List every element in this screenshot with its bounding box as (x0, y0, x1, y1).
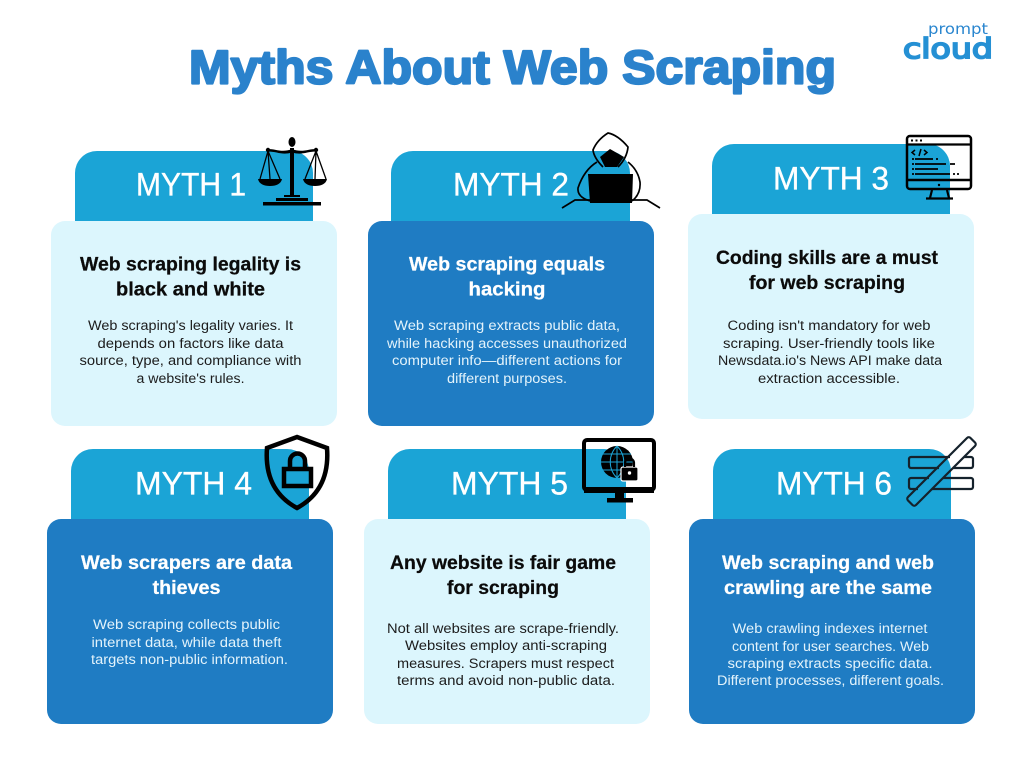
panel: myth 2 (368, 151, 654, 426)
icon: hooded hacker (562, 133, 660, 208)
panel: myth 5 (364, 449, 650, 724)
myth 1 body: a website's rules. (136, 371, 244, 386)
myth 1 body: Web scraping's legality varies. It (88, 318, 293, 333)
myth 3 body: scraping. User-friendly tools like (723, 336, 935, 351)
myth 3 heading: for web scraping (749, 273, 905, 294)
myth 4 heading: thieves (152, 578, 220, 599)
panel: myth 1 (51, 151, 337, 426)
myth 4 body (91, 617, 288, 667)
myth 4 heading (81, 553, 292, 599)
myth 6 heading: crawling are the same (724, 578, 932, 599)
myth 2 body (386, 318, 627, 386)
myth 1 heading: black and white (116, 280, 265, 300)
myth 3 body (718, 318, 943, 386)
myth 3 card (688, 214, 974, 419)
myth 3 body: extraction accessible. (758, 371, 900, 386)
myth 5 body: Not all websites are scrape-friendly. (387, 621, 619, 636)
myth 6 body (717, 621, 944, 688)
myth 1 heading: Web scraping legality is (80, 254, 301, 276)
myth 3 heading (716, 248, 939, 294)
myth 5 card (364, 519, 650, 724)
panel: myth 6 (689, 449, 975, 724)
myth 1 body: source, type, and compliance with (80, 353, 302, 368)
logo: prompt cloud: cloud (903, 32, 993, 65)
myth 5 label: MYTH 5 (451, 466, 568, 502)
myth 3 label: MYTH 3 (773, 160, 889, 196)
myth 6 heading (722, 553, 934, 599)
icon: security shield with padlock (267, 437, 327, 508)
myth 4 heading: Web scrapers are data (81, 553, 292, 574)
myth 2 heading: hacking (468, 280, 546, 300)
panel: myth 4 (47, 449, 333, 724)
myth 3 body: Newsdata.io's News API make data (718, 353, 943, 368)
myth 5 body: terms and avoid non-public data. (397, 673, 615, 688)
myth 2 body: Web scraping extracts public data, (394, 318, 620, 333)
myth 1 card (51, 221, 337, 426)
icon: code window monitor (907, 136, 971, 198)
myth 5 body: Websites employ anti-scraping (405, 638, 607, 653)
myth 6 body: content for user searches. Web (732, 639, 929, 654)
myth 4 label: MYTH 4 (135, 466, 252, 502)
myth 6 tab (713, 449, 951, 523)
myth 2 body: different purposes. (447, 371, 567, 386)
myth 5 body: measures. Scrapers must respect (397, 656, 614, 671)
logo: prompt cloud (903, 20, 993, 65)
myth 6 body: scraping extracts specific data. (728, 656, 932, 671)
myth 4 body: targets non-public information. (91, 652, 288, 667)
myth 2 label: MYTH 2 (453, 166, 569, 202)
myth 6 heading: Web scraping and web (722, 553, 934, 574)
panel: myth 3 (688, 144, 974, 419)
myth 5 heading (390, 553, 616, 599)
myth 2 tab (391, 151, 630, 225)
myth 1 tab (75, 151, 313, 225)
myth 1 heading (80, 254, 301, 300)
myth 1 body: depends on factors like data (98, 336, 284, 351)
myth 2 heading: Web scraping equals (409, 254, 605, 276)
myth 2 body: computer info—different actions for (392, 353, 623, 368)
myth 1 body (80, 318, 302, 386)
myth 6 body: Different processes, different goals. (717, 673, 944, 688)
myth 4 card (47, 519, 333, 724)
myth 4 body: internet data, while data theft (92, 635, 282, 650)
myth 2 body: while hacking accesses unauthorized (386, 336, 627, 351)
myth 5 tab (388, 449, 626, 523)
myth 3 heading: Coding skills are a must (716, 248, 939, 269)
myth 4 tab (71, 449, 309, 523)
myth 5 heading: Any website is fair game (390, 553, 616, 574)
myth 3 tab (712, 144, 950, 218)
icon: scales of justice (258, 137, 327, 206)
myth 3 body: Coding isn't mandatory for web (728, 318, 930, 333)
logo: prompt cloud: prompt (928, 20, 988, 38)
icon: monitor with globe and padlock (584, 440, 654, 502)
myth 6 body: Web crawling indexes internet (732, 621, 928, 636)
myth 5 body (387, 621, 619, 688)
myth 6 label: MYTH 6 (776, 466, 892, 502)
myth 1 label: MYTH 1 (136, 166, 246, 202)
icon: crossed-out list bars (907, 437, 976, 506)
myth 2 heading (409, 254, 605, 300)
myth 4 body: Web scraping collects public (93, 617, 280, 632)
myth 2 card (368, 221, 654, 426)
title: Myths About Web Scraping (189, 40, 836, 94)
myth 5 heading: for scraping (447, 578, 559, 599)
myth 6 card (689, 519, 975, 724)
